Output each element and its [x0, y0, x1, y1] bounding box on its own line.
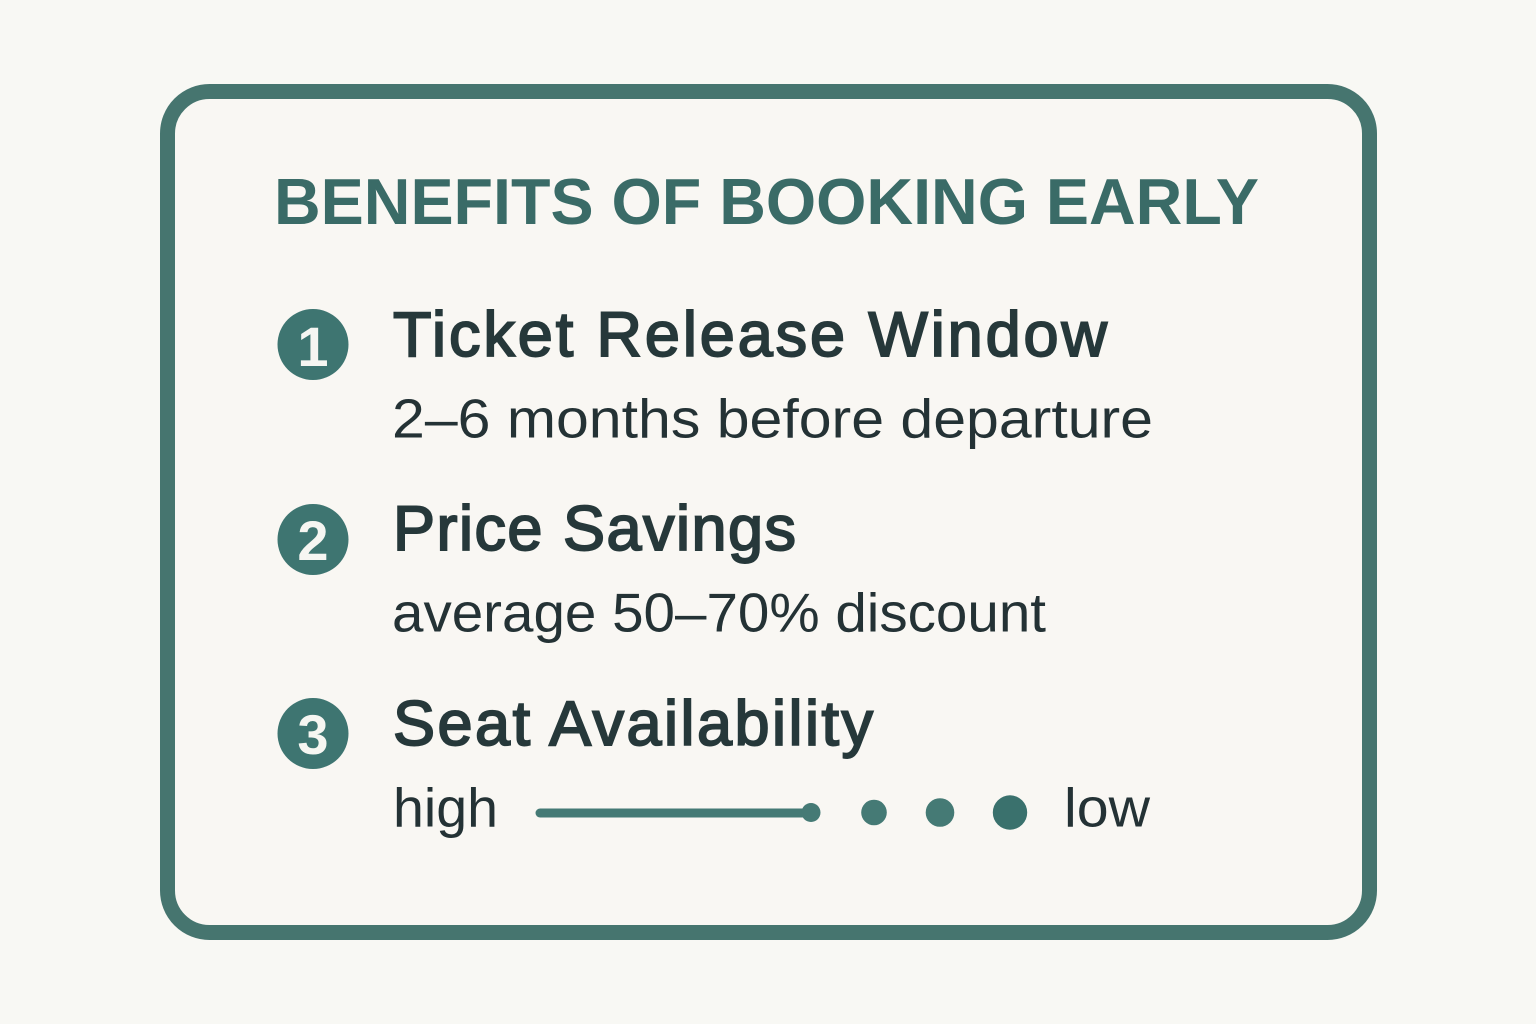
icon: number 2 badge [278, 504, 348, 575]
panel: card [168, 92, 1370, 932]
label: low: low [1064, 776, 1150, 838]
heading: seat availability: Seat Availability [393, 689, 874, 759]
item 1: ticket release window [278, 300, 1153, 450]
text: average discount: average 50–70% discount [392, 582, 1046, 644]
icon: number 3 badge: 3 [297, 703, 329, 766]
icon: number 1 badge: 1 [297, 315, 329, 378]
label: high: high [393, 776, 498, 838]
icon: number 2 badge: 2 [297, 509, 329, 572]
heading: ticket release window: Ticket Release Window [393, 300, 1108, 370]
item 3: seat availability [278, 689, 1150, 838]
icon: number 1 badge [278, 309, 348, 380]
text: departure window: 2–6 months before departure [392, 388, 1153, 450]
availability scale [540, 795, 1027, 830]
icon: number 3 badge [278, 698, 348, 769]
item 2: price savings [278, 494, 1046, 644]
heading: price savings: Price Savings [393, 494, 796, 564]
title: BENEFITS OF BOOKING EARLY [274, 165, 1259, 238]
